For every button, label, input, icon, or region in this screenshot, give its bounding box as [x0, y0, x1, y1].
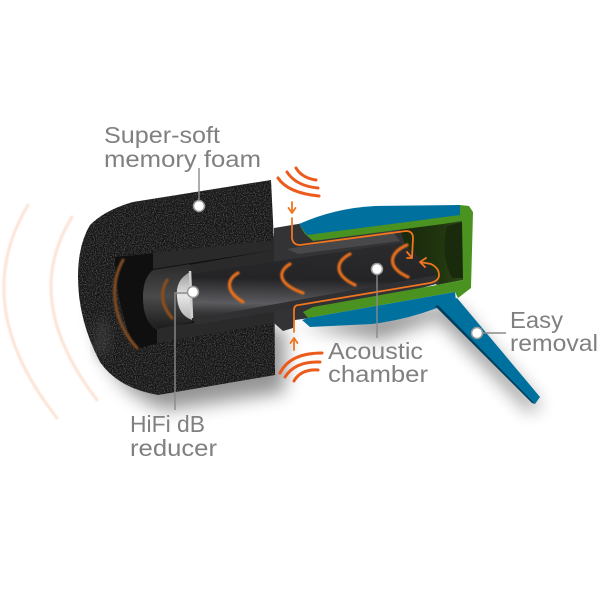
case green shell: [300, 205, 473, 318]
case blue shell: [299, 205, 460, 327]
label: acoustic chamber: [328, 338, 428, 387]
inner sleeve: [143, 240, 274, 343]
label: easy removal: removal: [510, 330, 598, 356]
airflow path bottom: [290, 258, 439, 350]
marker: removal: [472, 328, 482, 338]
sound pulses inside tube: [115, 245, 408, 348]
airflow path top: [288, 202, 413, 258]
drop shadows: [95, 300, 540, 412]
label: acoustic chamber: chamber: [328, 361, 428, 387]
marker: chamber: [372, 264, 382, 274]
label: memory foam: memory foam: [104, 146, 261, 172]
label: reducer: [130, 411, 217, 461]
incoming sound waves bottom: [280, 353, 322, 381]
label: memory foam: [104, 122, 261, 172]
stem: [274, 222, 440, 331]
acoustic tube: [190, 243, 437, 319]
label: reducer: reducer: [130, 435, 217, 461]
label: easy removal: Easy: [510, 307, 564, 333]
leader lines: [175, 168, 506, 410]
label: memory foam: Super-soft: [104, 122, 221, 148]
incoming sound waves top: [278, 168, 319, 196]
reducer disc: [177, 271, 192, 320]
marker: reducer: [188, 286, 198, 298]
foam highlight: [96, 318, 108, 358]
label: acoustic chamber: Acoustic: [328, 338, 423, 364]
removal tab: [435, 298, 540, 404]
label: easy removal: [510, 307, 598, 356]
case interior: [385, 221, 463, 285]
foam cavity: [115, 242, 274, 350]
marker: foam: [194, 200, 204, 212]
memory foam tip: [78, 180, 275, 395]
faint outgoing sound waves: [4, 205, 97, 418]
upper foam lip: [97, 195, 274, 257]
label: reducer: HiFi dB: [130, 411, 205, 437]
